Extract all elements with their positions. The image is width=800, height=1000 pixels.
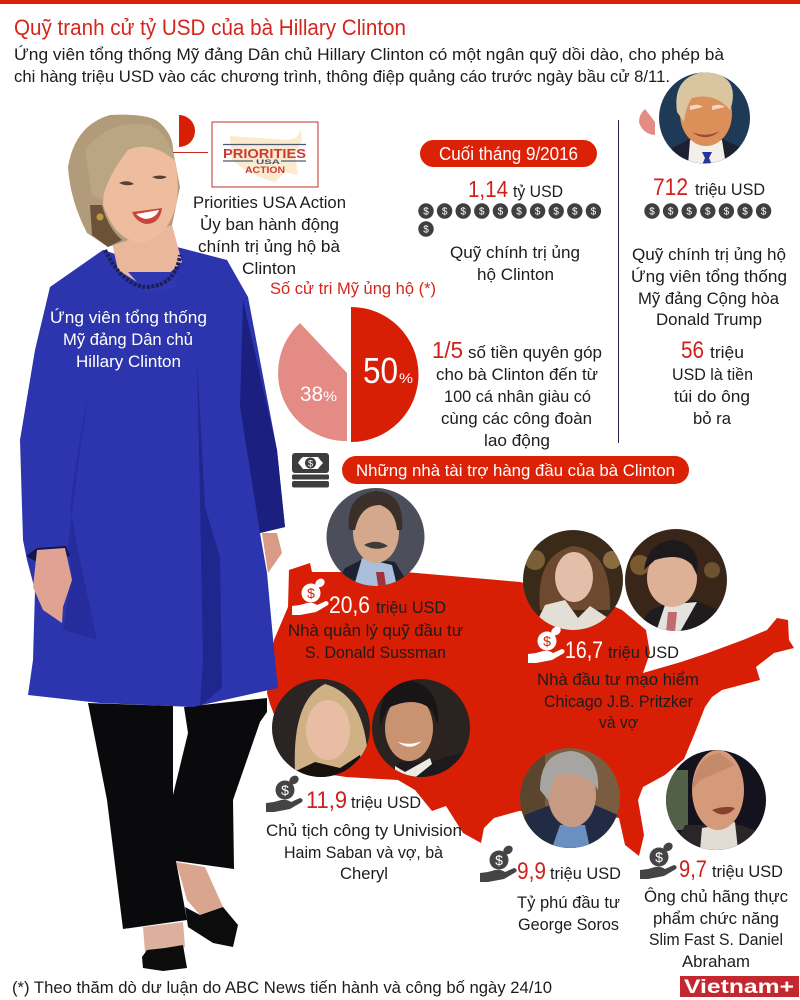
pie chart: voter support: 50 <box>363 350 398 391</box>
map of the United States <box>267 563 794 856</box>
Sussman text <box>288 592 463 662</box>
icon: money hand, Saban: $ <box>281 782 289 798</box>
Pritzker text: Chicago J.B. Pritzker <box>544 692 693 711</box>
Trump own money <box>672 337 753 428</box>
Trump own money: bỏ ra <box>693 409 732 428</box>
right ankle <box>176 862 223 915</box>
pie chart: voter support: % <box>323 388 337 404</box>
Saban text: Chủ tịch công ty Univision <box>266 821 462 840</box>
coins: Trump 712 million: $ <box>724 206 730 218</box>
Pritzker text: Nhà đầu tư mạo hiểm <box>537 670 699 689</box>
coins: Clinton 1.14 billion: $ <box>572 206 578 218</box>
Soros text <box>517 858 621 934</box>
1/5 donation text: số tiền quyên góp <box>468 343 602 362</box>
earring <box>96 214 104 220</box>
label on coat: Mỹ đảng Dân chủ <box>63 330 193 349</box>
left hand <box>33 548 72 623</box>
coins: Clinton 1.14 billion: $ <box>479 206 485 218</box>
icon: money hand, Sussman <box>292 577 329 615</box>
donors pill: Những nhà tài trợ hàng đầu của bà Clinton <box>356 461 675 480</box>
fringe <box>85 124 174 200</box>
coins: Clinton 1.14 billion: $ <box>423 206 429 218</box>
Clinton fund description: hộ Clinton <box>477 265 554 284</box>
Trump fund description: Donald Trump <box>656 310 762 329</box>
coat shadows <box>240 300 285 533</box>
Soros text: triệu USD <box>550 864 621 883</box>
connector line <box>173 152 208 154</box>
donors pill <box>342 456 689 484</box>
coins: Trump 712 million: $ <box>649 206 655 218</box>
right hand <box>262 533 282 573</box>
photo: Pritzker's wife <box>523 530 623 632</box>
Abraham text: Abraham <box>682 952 750 971</box>
Trump fund amount: triệu USD <box>695 180 765 199</box>
intro text: Ứng viên tổng thống Mỹ đảng Dân chủ Hillary Clinton có một ngân quỹ dồi dào, cho phép bà <box>14 45 725 64</box>
logo: Vietnam+: Vietnam+ <box>684 977 794 998</box>
Sussman text: S. Donald Sussman <box>305 643 446 662</box>
coins: Clinton 1.14 billion: $ <box>535 206 541 218</box>
Clinton 50% <box>351 307 418 442</box>
label on coat: Hillary Clinton <box>76 352 181 371</box>
Saban text: Haim Saban và vợ, bà <box>284 843 443 862</box>
poll heading: Số cử tri Mỹ ủng hộ (*) <box>270 279 436 298</box>
Saban text: Cheryl <box>340 864 388 883</box>
small pink pie: Trump <box>639 109 655 135</box>
Abraham text: 9,7 <box>679 856 707 883</box>
photo: Donald Trump <box>659 72 751 165</box>
logo: Priorities USA Action: PRIORITIES <box>223 146 306 161</box>
date pill <box>420 140 597 167</box>
Soros text: 9,9 <box>517 858 546 885</box>
necklace <box>105 250 180 287</box>
logo: Vietnam+ <box>680 976 799 998</box>
Trump fund amount <box>653 174 765 201</box>
Pritzker text: 16,7 <box>565 637 603 664</box>
intro text <box>14 45 725 86</box>
coins: Trump 712 million: $ <box>705 206 711 218</box>
icon: money hand, Saban <box>266 774 303 812</box>
left foot <box>143 922 185 952</box>
1/5 donation text: cùng các công đoàn <box>441 409 592 428</box>
icon: money hand, Abraham: $ <box>655 849 663 865</box>
1/5 donation text: 1/5 <box>432 337 463 363</box>
Priorities description <box>193 193 346 278</box>
logo: Priorities USA Action <box>212 122 318 187</box>
Clinton fund amount: tỷ USD <box>513 182 563 201</box>
Priorities description: Ủy ban hành động <box>200 215 339 234</box>
Abraham text: Slim Fast S. Daniel <box>649 930 783 949</box>
hair <box>68 115 180 247</box>
right shoe <box>185 907 238 947</box>
title: Quỹ tranh cử tỷ USD của bà Hillary Clinton <box>14 15 406 40</box>
coins: Trump 712 million: $ <box>742 206 748 218</box>
Clinton fund description: Quỹ chính trị ủng <box>450 243 580 262</box>
coins: Clinton 1.14 billion: $ <box>516 206 522 218</box>
1/5 donation text: lao động <box>484 431 550 450</box>
cuff <box>26 546 70 562</box>
Priorities description: Clinton <box>242 259 296 278</box>
1/5 donation text: cho bà Clinton đến từ <box>436 365 598 384</box>
Trump own money: USD là tiền <box>672 365 753 384</box>
pie chart: voter support: % <box>399 370 413 386</box>
label on coat <box>50 308 207 371</box>
Trump own money: 56 <box>681 337 704 364</box>
icon: stack of money <box>292 453 329 488</box>
Abraham text <box>644 856 788 971</box>
coins: Trump 712 million: $ <box>668 206 674 218</box>
icon: money hand, Pritzker <box>528 625 565 663</box>
logo: Priorities USA Action: USA <box>256 160 281 166</box>
coins: Clinton 1.14 billion: $ <box>460 206 466 218</box>
photo: Cheryl Saban <box>272 679 370 778</box>
label on coat: Ứng viên tổng thống <box>50 308 207 327</box>
Soros text: George Soros <box>518 915 619 934</box>
logo: Priorities USA Action: ACTION <box>245 165 285 175</box>
Sussman text: triệu USD <box>376 598 446 617</box>
intro text: chi hàng triệu USD vào các chương trình, thông điệp quảng cáo trước ngày bầu cử 8/11. <box>14 67 670 86</box>
photo: S. Donald Sussman <box>326 488 426 588</box>
coins: Trump 712 million: $ <box>686 206 692 218</box>
Saban text: triệu USD <box>351 793 421 812</box>
Clinton fund amount: 1,14 <box>468 176 508 202</box>
photo: Haim Saban <box>372 679 470 780</box>
coat <box>20 247 285 707</box>
Trump own money: triệu <box>710 343 744 362</box>
trousers <box>88 698 267 929</box>
left shoe <box>142 945 187 971</box>
Abraham text: triệu USD <box>712 862 783 881</box>
coins: Clinton 1.14 billion: $ <box>498 206 504 218</box>
icon: money hand, Soros: $ <box>495 852 503 868</box>
half pie: Priorities <box>179 115 195 147</box>
icon: money hand, Abraham <box>640 841 677 879</box>
Pritzker text <box>537 637 699 732</box>
pie chart: voter support <box>278 307 418 442</box>
photo: S. Daniel Abraham <box>666 750 766 850</box>
pie chart: voter support: 38 <box>300 383 323 406</box>
Saban text: 11,9 <box>306 787 347 814</box>
coins: Clinton 1.14 billion <box>418 203 601 237</box>
icon: money hand, Sussman: $ <box>307 585 315 601</box>
face <box>103 145 178 243</box>
Trump own money: túi do ông <box>674 387 750 406</box>
1/5 donation text: 100 cá nhân giàu có <box>444 387 591 406</box>
Trump fund amount: 712 <box>653 174 688 201</box>
photo: J.B. Pritzker <box>625 529 728 632</box>
icon: money hand, Pritzker: $ <box>543 633 551 649</box>
Trump fund description <box>631 245 787 329</box>
coins: Trump 712 million: $ <box>761 206 767 218</box>
coins: Clinton 1.14 billion: $ <box>591 206 597 218</box>
Abraham text: phẩm chức năng <box>653 909 779 928</box>
icon: stack of money: $ <box>308 458 313 468</box>
eyes <box>119 176 167 185</box>
Soros text: Tỷ phú đầu tư <box>517 893 620 912</box>
Saban text <box>266 787 462 883</box>
Trump fund description: Mỹ đảng Cộng hòa <box>638 289 780 308</box>
coins: Clinton 1.14 billion: $ <box>553 206 559 218</box>
Trump fund description: Quỹ chính trị ủng hộ <box>632 245 786 264</box>
Pritzker text: và vợ <box>599 713 638 732</box>
neck <box>108 225 182 290</box>
Pritzker text: triệu USD <box>608 643 679 662</box>
photo: George Soros <box>520 748 620 848</box>
date pill: Cuối tháng 9/2016 <box>439 144 578 164</box>
Trump fund description: Ứng viên tổng thống <box>631 267 787 286</box>
top red bar <box>0 0 800 4</box>
Priorities description: chính trị ủng hộ bà <box>198 237 341 256</box>
coins: Trump 712 million <box>644 203 771 219</box>
coins: Clinton 1.14 billion: $ <box>423 224 429 236</box>
coins: Clinton 1.14 billion: $ <box>442 206 448 218</box>
mouth <box>132 208 162 224</box>
figure: Hillary Clinton <box>20 115 285 971</box>
Sussman text: Nhà quản lý quỹ đầu tư <box>288 621 463 640</box>
1/5 donation text <box>432 337 602 450</box>
Sussman text: 20,6 <box>329 592 370 619</box>
icon: money hand, Soros <box>480 844 517 882</box>
Clinton fund amount <box>468 176 563 202</box>
Trump 38% <box>278 323 347 441</box>
Priorities description: Priorities USA Action <box>193 193 346 212</box>
inner dress <box>128 272 178 292</box>
Abraham text: Ông chủ hãng thực <box>644 887 788 906</box>
footnote: (*) Theo thăm dò dư luận do ABC News tiến hành và công bố ngày 24/10 <box>12 978 552 997</box>
Clinton fund description <box>450 243 580 284</box>
hair shadow <box>90 205 122 247</box>
